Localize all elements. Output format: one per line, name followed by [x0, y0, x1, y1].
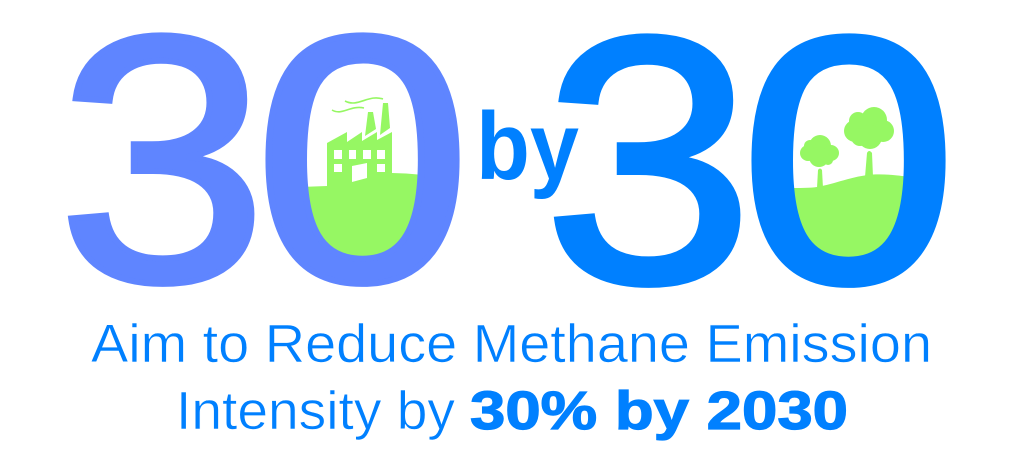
heading: by: by	[476, 93, 579, 200]
icon: factory scene inside zero	[300, 98, 424, 262]
heading: 30 (second, blue)	[543, 0, 958, 356]
heading: 30 (first, periwinkle)	[57, 0, 472, 355]
icon: trees scene inside zero	[786, 107, 911, 262]
text: bold caption highlight: 30% by 2030	[470, 381, 848, 441]
text: second caption line: Intensity by	[176, 381, 455, 441]
text: first caption line: Aim to Reduce Methane Emission	[91, 314, 932, 374]
